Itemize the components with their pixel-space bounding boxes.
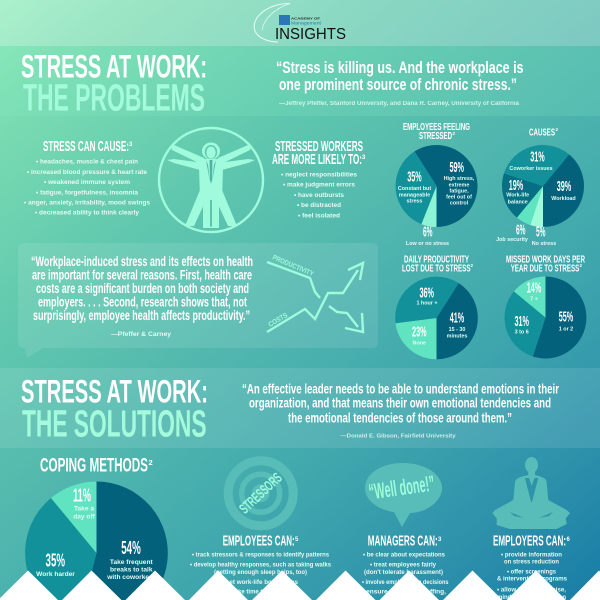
header strip	[0, 0, 600, 46]
chart: daily productivity lost: None	[413, 340, 426, 346]
text block: stressed workers: • be distracted	[297, 202, 341, 209]
text block: stressed workers: ARE MORE LIKELY TO:	[272, 152, 362, 168]
text block: employers can	[493, 533, 570, 600]
text block: employees can: • set work-life boundaries	[222, 579, 298, 586]
chart: causes: 6%	[516, 221, 525, 238]
chart: employees feeling stressed	[396, 121, 477, 247]
chart: missed work days: 1 or 2	[559, 326, 573, 332]
text block: stress can cause: STRESS CAN CAUSE:	[43, 139, 129, 155]
chart: coping methods: COPING METHODS	[40, 456, 148, 477]
chart: missed work days: 31%	[514, 313, 529, 330]
chart: productivity and costs arrows: PRODUCTIVITY	[271, 254, 315, 278]
chart: causes: Job security	[496, 237, 528, 243]
title: the problems: THE PROBLEMS	[23, 78, 205, 120]
title: the problems	[21, 48, 207, 120]
panel: workplace stress quote	[18, 243, 378, 358]
text block: stressed workers: • make judgment errors	[283, 182, 355, 189]
text block: stress can cause: • anger, anxiety, irritability, mood swings	[24, 199, 150, 206]
text block: employees can: 5	[295, 537, 299, 543]
text block: managers can: 3	[438, 537, 442, 543]
chart: daily productivity lost: 2	[470, 263, 474, 268]
logo: ACADEMY OF	[291, 16, 320, 20]
quote: Pfeffer and Carney	[276, 58, 524, 107]
chart: causes: 31%	[530, 149, 545, 166]
text block: stressed workers: • have outbursts	[294, 192, 344, 199]
text block: managers can: • be clear about expectations	[363, 552, 445, 559]
text block: stress can cause: 3	[129, 142, 133, 148]
chart: employees feeling stressed: 2	[452, 131, 456, 136]
chart: coping methods: day off	[73, 513, 96, 520]
chart: coping methods: 35%	[46, 550, 65, 571]
chart: employees feeling stressed: High stress,	[444, 176, 475, 182]
text block: employees can: • track stressors & responses to identify patterns	[192, 552, 329, 559]
title: the solutions: THE SOLUTIONS	[22, 404, 206, 446]
icon: meditating employer	[492, 457, 570, 529]
text block: stressed workers: 3	[362, 155, 366, 161]
quote text: costs are a significant burden on both society and	[36, 281, 249, 297]
quote: Pfeffer and Carney: —Jeffrey Pfeffer, Stanford University, and Dana R. Carney, University of California	[279, 101, 520, 107]
chart: daily productivity lost: minutes	[447, 333, 467, 339]
chart: coping methods: Work harder	[36, 571, 75, 578]
chart: daily productivity lost: 36%	[419, 285, 434, 302]
chart: employees feeling stressed: control	[450, 201, 469, 207]
chart: coping methods: Take a	[74, 506, 94, 513]
logo: Management	[291, 20, 322, 26]
text block: stress can cause: • headaches, muscle & chest pain	[36, 159, 138, 166]
chart: causes: balance	[508, 199, 528, 205]
text block: stress can cause: • fatigue, forgetfulness, insomnia	[36, 189, 138, 196]
logo: INSIGHTS	[275, 26, 346, 43]
chart: daily productivity lost: 15 - 30	[449, 327, 465, 333]
chart: coping methods: with coworkers	[106, 574, 156, 581]
torn paper bottom edge	[0, 570, 600, 600]
icon: well done speech bubble: “Well done!”	[367, 471, 436, 504]
text block: stress can cause: • increased blood pressure & heart rate	[27, 169, 147, 176]
chart: employees feeling stressed: 59%	[449, 159, 464, 176]
quote: Gibson	[242, 381, 559, 439]
quote text: are important for several reasons. First, health care	[32, 267, 252, 283]
chart: missed work days: 3 to 6	[515, 330, 529, 336]
chart: missed work days: 55%	[559, 309, 573, 326]
chart: employees feeling stressed: Constant but	[398, 186, 431, 192]
chart: coping methods: 54%	[121, 537, 141, 558]
quote text: employers. . . . Second, research shows that, not	[38, 294, 247, 310]
text block: managers can: • ensure sufficient staffing,	[362, 588, 446, 596]
chart: employees feeling stressed: 35%	[407, 169, 422, 186]
chart: daily productivity lost: 41%	[450, 309, 464, 326]
chart: causes: Work-life	[506, 193, 529, 199]
text block: stressed workers	[272, 139, 366, 219]
quote text: —Pfeffer & Carney	[111, 331, 171, 338]
chart: employees feeling stressed: fatigue,	[449, 188, 469, 194]
band: solutions heading	[0, 368, 600, 448]
text block: stressed workers: STRESSED WORKERS	[275, 139, 363, 155]
text block: employees can: • develop healthy responses, such as taking walks	[190, 562, 331, 569]
text block: stressed workers: • feel isolated	[298, 212, 340, 219]
chart: coping methods: 11%	[73, 485, 91, 506]
chart: coping methods: breaks to talk	[110, 566, 153, 574]
text block: managers can	[362, 533, 449, 596]
chart: missed work days: 2	[580, 263, 582, 268]
text block: employers can: on stress reduction	[504, 559, 559, 566]
logo	[254, 3, 346, 43]
text block: stress can cause	[24, 139, 150, 217]
chart: daily productivity lost: 1 hour +	[416, 300, 438, 306]
icon: stressors target: STRESSORS	[237, 470, 286, 517]
icon: vitruvian businessman	[159, 128, 263, 232]
quote text: “Workplace-induced stress and its effects on health	[31, 254, 253, 270]
chart: causes: 2	[556, 127, 558, 132]
chart: causes: No stress	[532, 241, 556, 247]
chart: employees feeling stressed: STRESSED	[419, 130, 452, 142]
text block: employers can: & intervention programs	[497, 576, 567, 583]
chart: coping methods	[25, 456, 168, 600]
chart: employees feeling stressed: 6%	[423, 224, 432, 241]
title: the problems: STRESS AT WORK:	[21, 48, 207, 84]
chart: causes: Coworker issues	[509, 166, 553, 172]
chart: employees feeling stressed: Low or no stress	[406, 241, 449, 247]
text block: employers can: 6	[566, 537, 570, 543]
chart: causes	[496, 127, 584, 247]
chart: productivity and costs arrows	[267, 254, 363, 332]
text block: stressed workers: • neglect responsibilities	[281, 172, 357, 179]
icon: well done speech bubble	[365, 463, 442, 527]
chart: coping methods: 2	[148, 458, 153, 467]
text block: managers can: • involve employees in decisions	[362, 579, 449, 586]
chart: missed work days: 7 +	[530, 297, 538, 303]
chart: employees feeling stressed: EMPLOYEES FEELING	[403, 121, 470, 133]
chart: causes: 5%	[536, 224, 545, 241]
text block: employees can	[190, 533, 331, 596]
band: problems heading	[0, 46, 600, 116]
chart: daily productivity lost: LOST DUE TO STRESS	[402, 263, 470, 275]
text block: employees can: (getting enough sleep helps, too)	[214, 569, 307, 576]
text block: stress can cause: • decreased ability to think clearly	[35, 210, 139, 217]
chart: employees feeling stressed: stress	[407, 198, 422, 204]
title: the solutions	[21, 374, 208, 446]
chart: causes: 19%	[509, 177, 523, 194]
quote text	[31, 254, 253, 338]
chart: daily productivity lost: 23%	[412, 324, 427, 341]
chart: missed work days: 14%	[527, 280, 541, 297]
text block: managers can: • treat employees fairly	[370, 562, 436, 569]
text block: employers can: • allow time to exercise,	[497, 587, 566, 594]
chart: daily productivity lost	[395, 253, 478, 359]
chart: causes: CAUSES	[529, 127, 555, 139]
chart: missed work days	[505, 253, 586, 358]
quote text: surprisingly, employee health affects productivity.”	[33, 308, 250, 324]
text block: employees can: • take time to recharge	[229, 588, 293, 596]
text block: employers can: • offer screenings	[507, 568, 556, 575]
text block: managers can: MANAGERS CAN:	[368, 533, 438, 550]
icon: stressors target	[228, 461, 293, 526]
chart: employees feeling stressed: extreme	[449, 183, 469, 189]
chart: employees feeling stressed: feel out of	[446, 194, 472, 200]
chart: causes: 39%	[557, 178, 571, 195]
chart: daily productivity lost: DAILY PRODUCTIVITY	[404, 253, 469, 265]
chart: causes: Workload	[551, 196, 576, 202]
title: the solutions: STRESS AT WORK:	[21, 374, 208, 410]
chart: productivity and costs arrows: COSTS	[268, 312, 289, 329]
chart: employees feeling stressed: manageable	[399, 193, 430, 199]
quote: Gibson: —Donald E. Gibson, Fairfield University	[341, 433, 457, 439]
text block: employers can: • provide information	[501, 552, 562, 559]
text block: stress can cause: • weakened immune system	[44, 179, 130, 186]
chart: coping methods: Take frequent	[110, 559, 153, 566]
text block: employees can: EMPLOYEES CAN:	[223, 533, 295, 550]
text block: managers can: (don't tolerate harassment)	[364, 569, 443, 576]
